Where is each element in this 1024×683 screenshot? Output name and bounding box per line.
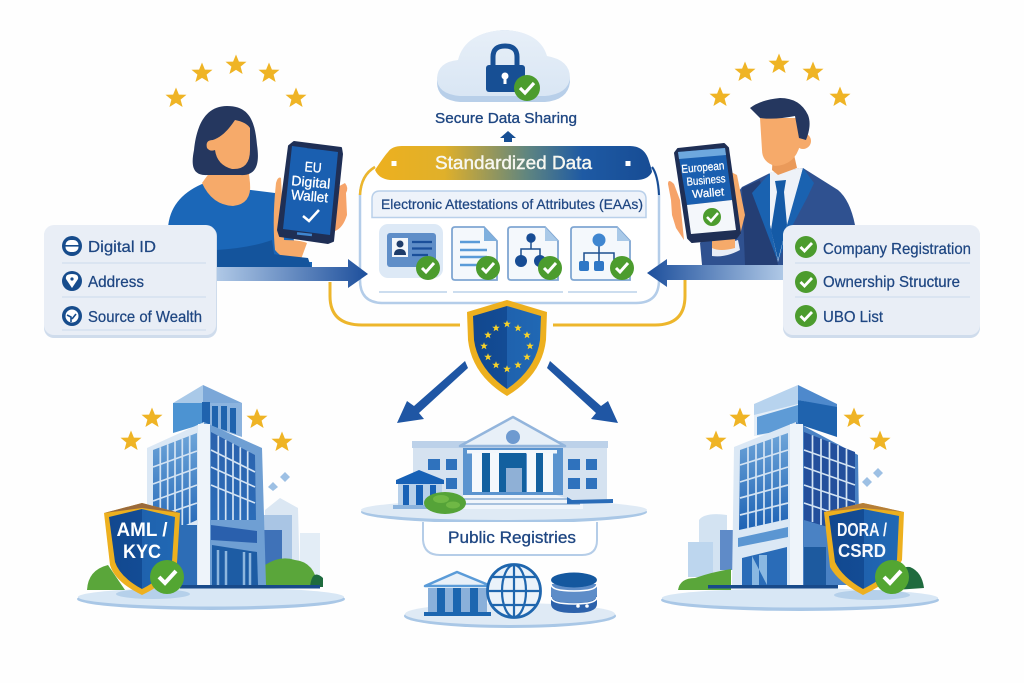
banner: Standardized Data: [375, 146, 652, 180]
person: man with European Business Wallet: [668, 98, 855, 265]
icon: database: [551, 572, 597, 613]
arrow: left wallet to EAAs: [217, 259, 368, 288]
label: Ownership Structure: Ownership Structure: [823, 274, 960, 291]
gold connector lines: [330, 280, 685, 325]
label: Address: Address: [88, 274, 144, 291]
icon: document: [452, 227, 500, 280]
panel: personal attributes: [44, 225, 217, 338]
shield: AML/KYC: AML /: [116, 520, 168, 541]
shield: DORA/CSRD: CSRD: [838, 541, 886, 561]
person: woman with EU Digital Wallet: [168, 106, 347, 267]
shield: AML/KYC: KYC: [123, 542, 161, 563]
phone: EU Digital Wallet: Wallet: [290, 186, 329, 205]
building: bank with AML/KYC: [77, 385, 345, 610]
label box: Public Registries: Public Registries: [448, 529, 576, 547]
icon: padlock: [486, 46, 525, 92]
heading: Secure Data Sharing: Secure Data Sharing: [435, 110, 577, 127]
check: company registration: [795, 236, 817, 258]
building: company with DORA/CSRD: [661, 385, 939, 611]
stars: right arc: [710, 54, 850, 106]
icon: ID card: [379, 224, 443, 280]
label: Digital ID: Digital ID: [88, 239, 156, 256]
panel: company attributes: [783, 225, 980, 338]
phone: EU Digital Wallet: Digital: [291, 172, 331, 192]
check: UBO list: [795, 305, 817, 327]
icon: address: [62, 271, 82, 291]
banner: Standardized Data: Standardized Data: [435, 153, 593, 173]
icon: globe: [488, 564, 540, 618]
icon: org document small: [508, 227, 562, 280]
phone: European Business Wallet: European: [681, 160, 725, 176]
shield: DORA/CSRD: [824, 503, 910, 600]
phone: EU Digital Wallet: [278, 142, 342, 243]
check: ownership structure: [795, 271, 817, 293]
arrow: right wallet to EAAs: [647, 259, 783, 287]
label: UBO List: UBO List: [823, 309, 884, 326]
arrow: up to secure sharing: [500, 131, 516, 142]
building: public registries: [361, 417, 647, 555]
check badge: [875, 560, 909, 594]
label box: Public Registries: [423, 522, 597, 555]
label: Source of Wealth: Source of Wealth: [88, 309, 202, 326]
phone: European Business Wallet: Business: [686, 173, 726, 189]
heading: EAAs: Electronic Attestations of Attributes (EAAs): [381, 196, 643, 212]
phone: EU Digital Wallet: EU: [304, 158, 322, 176]
icons: registry, globe, database: [404, 564, 616, 628]
shield: EU stars: [467, 300, 547, 396]
panel: standardized data card: [360, 146, 659, 303]
icon: small bank: [424, 572, 491, 616]
icon: digital ID: [62, 236, 82, 256]
panel: EAAs: [372, 191, 646, 292]
stars: left arc: [166, 54, 306, 107]
windows: [153, 432, 258, 585]
shield: DORA/CSRD: DORA /: [837, 520, 887, 540]
shield: AML/KYC: [104, 503, 190, 599]
check badge: [150, 560, 184, 594]
arrow: shield to right company: [547, 361, 618, 423]
arrow: shield to left bank: [397, 361, 468, 423]
windows: [738, 432, 855, 585]
check badge: [514, 75, 540, 101]
cloud with lock: [437, 30, 570, 102]
phone: European Business Wallet: Wallet: [692, 186, 725, 201]
label: Company Registration: Company Registration: [823, 241, 971, 258]
icon: org document large: [571, 227, 634, 280]
phone: European Business Wallet: [675, 144, 740, 242]
icon: source of wealth: [62, 306, 82, 326]
